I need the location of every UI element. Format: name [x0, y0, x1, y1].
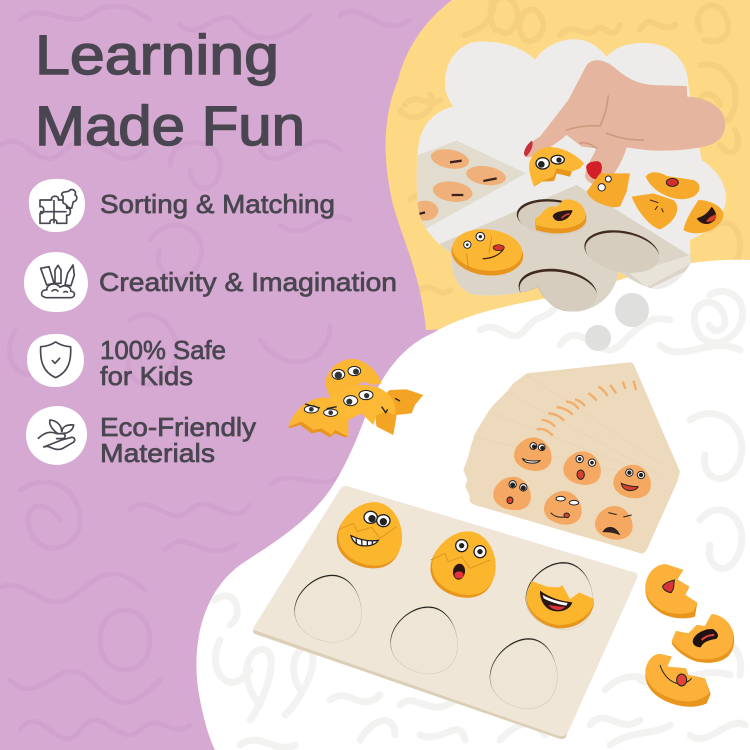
feature list [24, 179, 397, 468]
loose puzzle pieces top [288, 359, 423, 437]
wooden board [440, 185, 691, 312]
feature: safe for kids [27, 334, 226, 391]
hand [524, 60, 725, 184]
egg: surprised [423, 523, 505, 606]
loose piece: licking [645, 654, 711, 707]
feature: sorting and matching: Sorting & Matching [100, 189, 335, 219]
feature: safe for kids: for Kids [100, 361, 193, 391]
eyes on pieces [304, 366, 400, 416]
title: Learning [35, 23, 279, 86]
card stack [463, 362, 680, 553]
egg on board: smiling tongue [449, 226, 525, 279]
piece: star eyes [325, 359, 382, 398]
reference card [412, 141, 526, 230]
photo bubble: hand placing puzzle piece [416, 39, 726, 312]
main wooden board [253, 486, 637, 739]
piece: centre eyes [330, 385, 395, 425]
feature: creativity and imagination: Creativity & Imagination [99, 267, 397, 297]
feature: creativity and imagination [24, 252, 397, 312]
piece: sad right [376, 389, 423, 435]
feature: eco-friendly materials: Eco-Friendly [100, 412, 256, 442]
background: yellow panel [370, 0, 750, 340]
thought bubble dots [585, 293, 649, 351]
egg: grinning [330, 493, 412, 576]
title: Made Fun [35, 94, 305, 157]
feature: safe for kids: 100% Safe [100, 335, 226, 365]
held egg piece [529, 147, 584, 187]
loose egg pieces, lower right [645, 564, 734, 707]
loose egg pieces [587, 172, 723, 233]
reference cards fan [463, 362, 680, 553]
cloud photo background [416, 39, 726, 312]
feature: eco-friendly materials: Materials [100, 438, 215, 468]
feature: eco-friendly materials [26, 406, 256, 468]
empty egg holes [287, 553, 603, 717]
egg piece: laughing [527, 581, 594, 628]
loose piece: tongue [645, 564, 697, 618]
piece: angry left [288, 397, 348, 437]
card stack thumbnails [537, 381, 636, 435]
thumbnail faces [507, 443, 645, 534]
feature: sorting and matching [29, 179, 335, 232]
background: white panel [196, 260, 750, 750]
egg piece on board: shocked mouth [535, 200, 586, 233]
thumbnail eggs [491, 434, 655, 543]
loose piece: yelling [672, 614, 734, 663]
board body [253, 486, 637, 739]
title [35, 23, 305, 157]
